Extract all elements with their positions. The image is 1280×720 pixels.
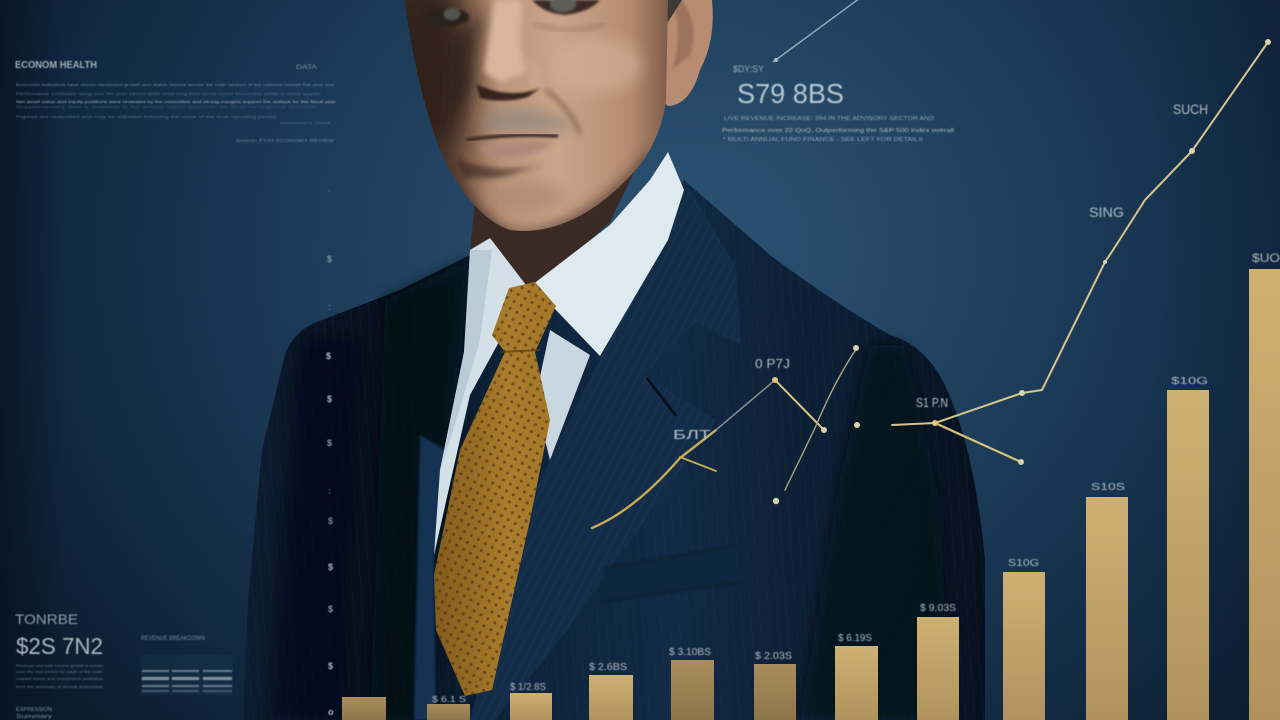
line chart labels: БЛТ	[673, 427, 711, 442]
vertical axis ticks: :	[328, 486, 331, 496]
left eye	[425, 8, 469, 26]
right lapel	[470, 180, 741, 720]
bar value labels: S10S	[1091, 482, 1125, 493]
descending segment	[775, 380, 824, 430]
right eye	[532, 0, 600, 15]
ear inner shadow	[672, 0, 694, 70]
body paragraph: top-left: Net asset value and equity positions were reviewed by the committee and strong margins support the outlook for the fiscal year	[16, 99, 337, 104]
peak segment	[716, 380, 775, 430]
necktie	[434, 282, 556, 696]
cheek highlight	[558, 37, 642, 93]
lower lip	[478, 142, 554, 158]
branch to lower node	[935, 423, 1021, 462]
shirt left collar	[434, 238, 526, 555]
shirt front	[535, 330, 590, 460]
nose highlight	[484, 0, 526, 82]
body paragraph: bottom-left: Revenue and total income growth is shown	[16, 663, 103, 668]
bar 4	[589, 675, 633, 720]
callout caption: * MULTI ANNUAL FUND FINANCE - SEE LEFT FOR DETAILS	[723, 137, 924, 143]
callout tag: $DY:SY	[733, 64, 764, 74]
caption: bottom-left: EXPRESSION	[16, 707, 52, 713]
vertical axis ticks: $	[327, 438, 332, 448]
panel: top-left text block	[15, 60, 337, 143]
bar 12	[1249, 269, 1280, 720]
callout: headline figure	[722, 0, 954, 143]
bar 8	[917, 617, 959, 720]
neck	[470, 160, 640, 290]
table heading: bottom-left: REVENUE BREAKDOWN	[141, 636, 205, 642]
bar value labels: $ 6.1 S	[432, 695, 466, 704]
big number: bottom-left: $2S 7N2	[16, 633, 103, 659]
jaw shadow	[445, 148, 650, 231]
nose side shadow	[446, 10, 484, 125]
person illustration	[243, 0, 985, 720]
nostril shadow	[476, 84, 540, 101]
vertical axis ticks: $	[327, 394, 332, 404]
vertical axis ticks: $	[326, 351, 331, 361]
body paragraph: bottom-left: from the summary of annual statements	[16, 684, 103, 689]
face	[405, 0, 668, 231]
line chart labels	[673, 101, 1208, 442]
vertical axis ticks	[326, 186, 334, 717]
bar value labels: S10G	[1008, 558, 1039, 569]
line chart labels: SING	[1089, 204, 1124, 220]
caption: bottom-left: Summary	[16, 714, 53, 720]
callout caption	[722, 116, 954, 143]
lapel notch line	[647, 378, 676, 416]
line chart labels: S1 P.N	[916, 395, 948, 410]
suit jacket	[243, 180, 985, 720]
heading: top-left: ECONOM HEALTH	[15, 60, 97, 71]
bar value labels: $ 3.10BS	[669, 647, 711, 658]
small tag: top-left: DATA	[296, 64, 318, 71]
callout number: S79 8BS	[737, 78, 844, 109]
bar value labels: $10G	[1171, 376, 1208, 387]
body paragraph: top-left: summary data	[280, 120, 332, 125]
line nodes	[772, 39, 1271, 504]
bar value labels: $ 2.6BS	[589, 662, 627, 673]
bar 5	[671, 660, 714, 720]
bar chart: gold revenue bars	[342, 269, 1280, 720]
panel: bottom-left summary	[15, 611, 233, 720]
arrow line: to callout	[773, 0, 860, 62]
body paragraph: top-left: Performance continues rising over the prior period while most long term funds report favourable yields in every quarter	[16, 91, 322, 96]
vertical axis ticks: :	[328, 302, 331, 312]
caption: bottom-left	[16, 707, 53, 720]
breast pocket	[602, 546, 740, 601]
under-eye bag	[535, 24, 605, 30]
chin light	[500, 182, 566, 212]
bar value labels: $ 9.03S	[920, 603, 956, 614]
bar 3	[510, 693, 552, 720]
bar 7	[835, 646, 878, 720]
body paragraph: top-left: Supplementary data is available in the annual report appendix for all of the regional divisions	[16, 104, 316, 109]
bar value labels	[432, 251, 1280, 704]
bar 11	[1167, 390, 1209, 720]
shirt left shade	[442, 250, 492, 465]
body paragraph: bottom-left: over the last period for each of the main	[16, 669, 103, 674]
body paragraph: top-left: Figures are unaudited and may be adjusted following the close of the final reporting period	[16, 114, 276, 119]
vertical axis ticks: $	[328, 661, 333, 671]
short branch	[680, 457, 716, 471]
vertical axis ticks: ·	[328, 186, 331, 196]
sleeve seam shadows	[270, 260, 950, 720]
shirt right collar	[532, 152, 684, 356]
bar value labels: $ 1/2.8S	[510, 682, 546, 693]
mouth line	[466, 135, 558, 140]
hair at temple	[652, 0, 682, 22]
body paragraph: bottom-left	[16, 663, 103, 689]
vertical axis ticks: $	[328, 562, 333, 572]
crossing line	[785, 348, 857, 490]
ear	[655, 0, 713, 106]
nasolabial fold	[546, 90, 580, 134]
left face shadow	[396, 0, 468, 165]
callout caption: LIVE REVENUE INCREASE: 394 IN THE ADVISORY SECTOR AND	[724, 116, 935, 122]
vertical axis ticks: $	[327, 254, 332, 264]
main rising line	[892, 42, 1268, 425]
bar 2	[427, 704, 470, 720]
jacket opening edge	[414, 435, 446, 720]
body paragraph: top-left: Economic indicators have shown measured growth and stable returns across the main sectors of the national market this year and	[16, 82, 334, 87]
footnote: top-left: Source: FY24 ECONOMY REVIEW	[236, 138, 335, 143]
body paragraph: bottom-left: market funds and investment portfolios	[16, 676, 103, 681]
line chart: gold trend with nodes	[592, 39, 1271, 528]
callout caption: Performance over 22 QoQ, Outperforming the S&P 500 Index overall	[722, 128, 954, 134]
body paragraph: top-left	[16, 82, 337, 125]
mini table: bottom-left	[141, 655, 233, 695]
bar value labels: $UO	[1252, 251, 1280, 265]
left rising segment	[592, 430, 716, 528]
bar 10	[1086, 497, 1128, 720]
line chart labels: SUCH	[1173, 101, 1208, 117]
bar 9	[1003, 572, 1045, 720]
line chart labels: 0 P7J	[755, 356, 790, 371]
chin shadow	[456, 158, 545, 178]
vertical axis ticks: $	[328, 604, 333, 614]
bar 1	[342, 697, 386, 720]
bar value labels: $ 2.03S	[755, 651, 792, 662]
nose wing	[532, 69, 533, 72]
upper lip area	[484, 108, 572, 132]
label: bottom-left heading: TONRBE	[15, 611, 78, 627]
vertical axis ticks: $	[328, 516, 333, 526]
right lapel pinstripes	[470, 180, 741, 720]
bar 6	[754, 664, 796, 720]
vertical axis ticks: o	[328, 707, 334, 717]
bar value labels: $ 6.19S	[838, 633, 872, 644]
